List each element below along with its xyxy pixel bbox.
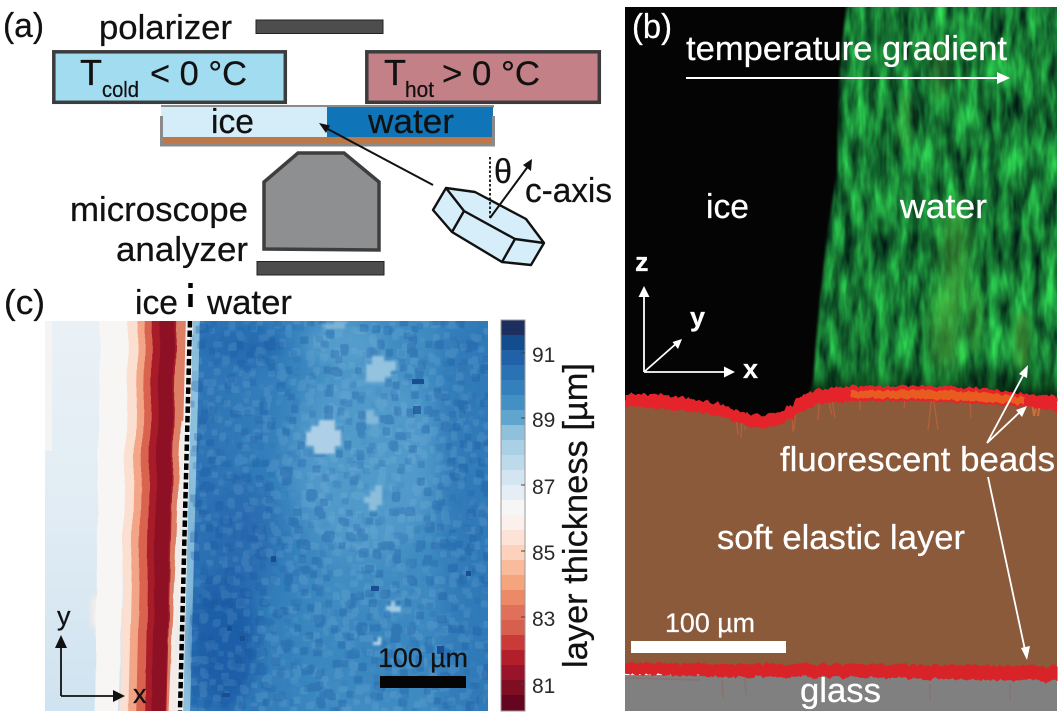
sample cell with ice, water and elastic layer: water [367,103,454,141]
water label: water [899,188,987,226]
icon: ice crystal [433,188,544,265]
microscope analyzer label [70,191,248,269]
colour bar tick labels: 91 [532,344,555,367]
soft elastic layer label: soft elastic layer [717,519,965,557]
panel (a): experimental setup [3,7,612,275]
black ice background [625,7,1057,427]
ice label: ice [135,284,178,322]
cold block [54,52,285,102]
temperature gradient arrow [686,72,1010,84]
xy axes: y [57,601,71,631]
colour bar tick labels: 87 [532,476,555,499]
polarizer label: polarizer [99,9,232,47]
xy axes: x [133,679,147,709]
ice label: ice [706,188,749,226]
panel label (c): (c) [4,284,45,322]
hot block: > 0 °C [442,55,540,93]
microscope objective [264,153,379,250]
lower fluorescent bead layer [625,663,1057,700]
spikes below bead layer [734,400,1040,438]
c-axis angle marks [490,153,612,218]
heat map [45,310,488,722]
cold block: < 0 °C [150,55,247,93]
colour bar tick labels [532,344,555,698]
polarizer bar [256,20,383,34]
cold block: cold [102,77,139,102]
sample cell with ice, water and elastic layer: ice [211,103,254,141]
water label: water [206,284,292,322]
panel (b): confocal cross-section [625,7,1057,711]
panel (c): layer thickness map [4,283,595,722]
xyz axes: x [743,354,758,384]
colour bar tick labels: 85 [532,542,555,565]
brown soft elastic layer [625,394,1057,672]
colour bar tick labels: 81 [532,675,555,698]
colour bar title: layer thickness [µm] [557,363,595,668]
arrows to beads [987,365,1030,660]
xyz axes: y [690,302,705,332]
xy axes [55,601,147,709]
glass label: glass [800,672,881,710]
ice-water boundary dashed line [180,283,190,711]
glass substrate [625,675,1057,711]
colour bar tick labels: 83 [532,608,555,631]
colour bar [501,320,525,711]
arrow to ice crystal [319,123,433,185]
scale bar 100 µm [631,608,786,653]
scale bar 100 µm: 100 µm [378,643,468,673]
scale bar 100 µm [378,643,468,688]
xyz axes: z [635,247,648,277]
sample cell with ice, water and elastic layer [161,103,494,145]
c-axis angle marks: θ [494,153,512,191]
fluorescent beads label: fluorescent beads [780,441,1055,479]
upper fluorescent bead layer [625,386,1057,429]
cold block: T [80,52,102,93]
scale bar 100 µm: 100 µm [665,608,755,638]
panel label (a): (a) [3,7,44,45]
xyz axes [635,247,758,384]
hot block: hot [405,77,434,102]
hot block: T [384,52,406,93]
temperature gradient label: temperature gradient [686,30,1008,68]
colour bar tick labels: 89 [532,409,555,432]
microscope analyzer label: analyzer [116,231,248,269]
c-axis angle marks: c-axis [525,172,612,210]
microscope analyzer label: microscope [70,191,248,229]
green water fluorescence [800,7,1057,407]
analyzer bar [257,262,384,275]
panel label (b): (b) [632,8,672,46]
hot block [367,52,599,102]
